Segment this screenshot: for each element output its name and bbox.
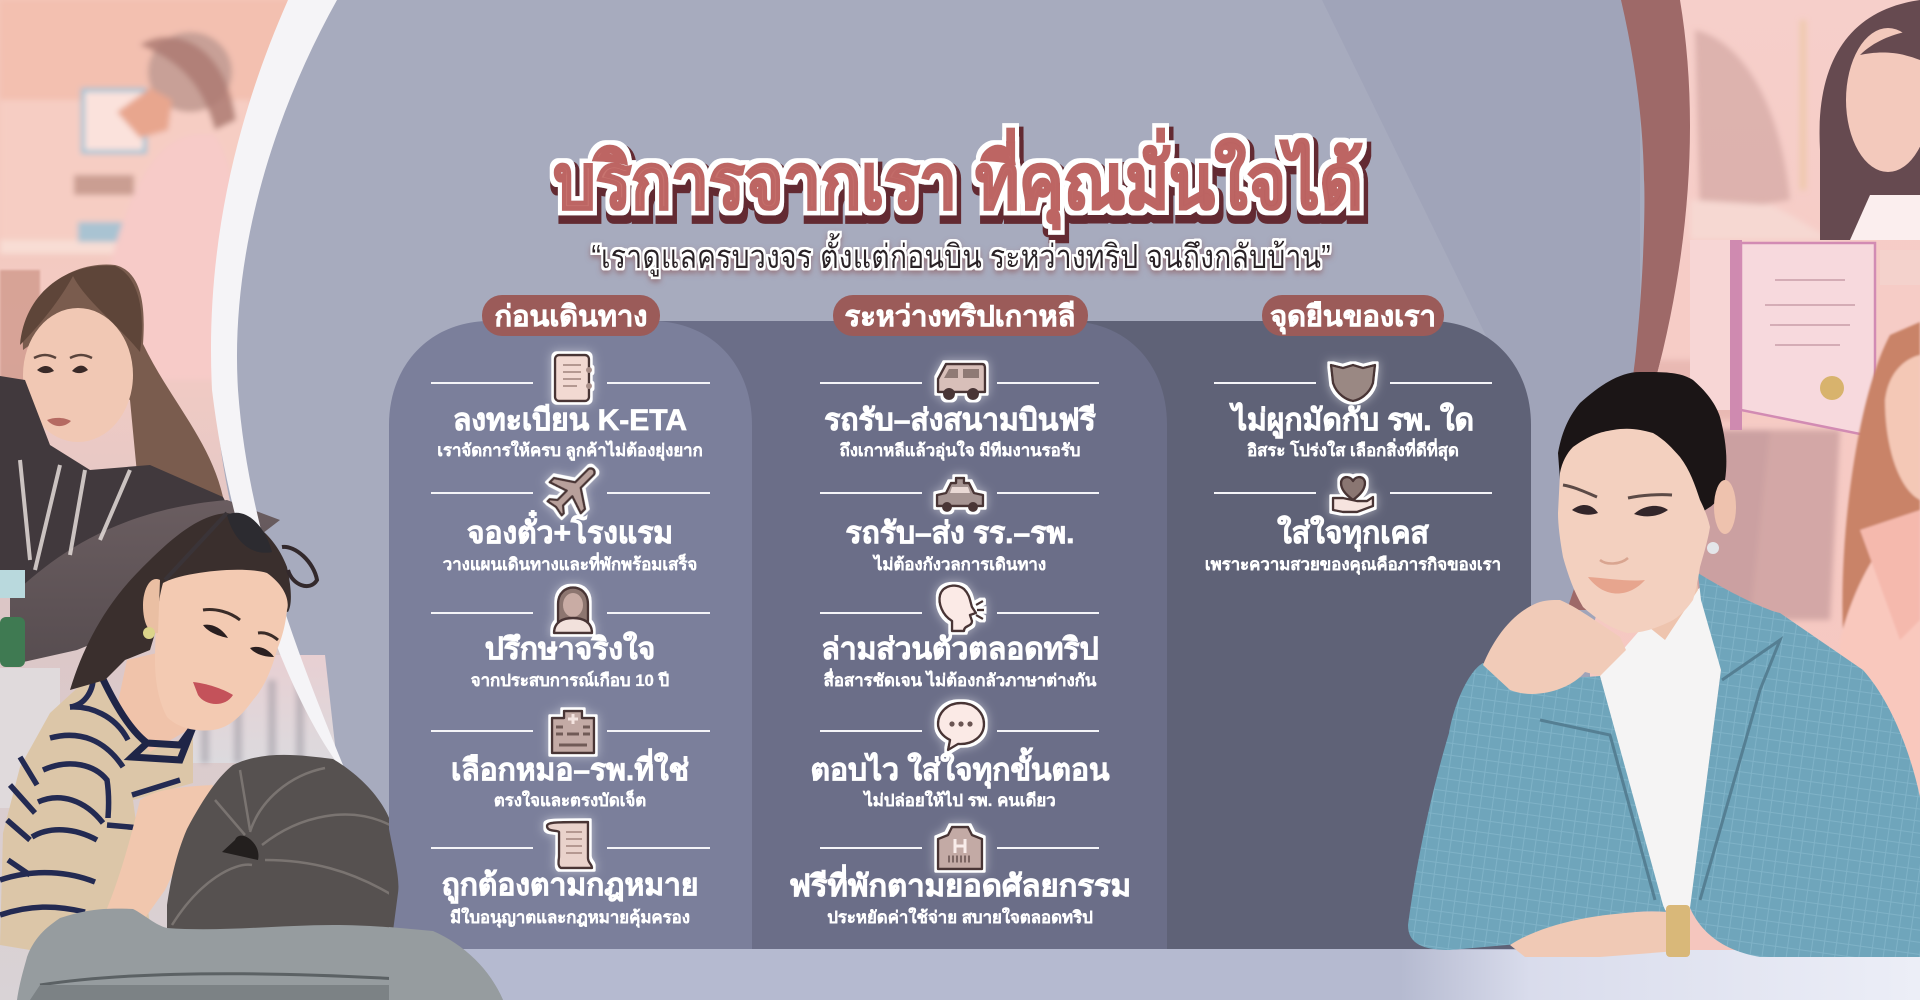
column 2 item: free stay: ประหยัดค่าใช้จ่าย สบายใจตลอดทริป — [827, 907, 1093, 927]
column 1 item: flight and hotel — [431, 454, 710, 574]
white arc on the left — [211, 0, 345, 770]
icon: heart in hand — [1333, 477, 1373, 512]
column 1 item: sincere consultation: จากประสบการณ์เกือบ 10 ปี — [471, 670, 669, 690]
column 2 item: personal interpreter: สื่อสารชัดเจน ไม่ต้องกลัวภาษาต่างกัน — [824, 668, 1097, 690]
column 1 item: sincere consultation — [431, 588, 710, 690]
column 2 item: airport transfer: รถรับ–ส่งสนามบินฟรี — [824, 404, 1096, 437]
neck — [1640, 560, 1698, 640]
hand — [1483, 600, 1626, 694]
icon: speech bubble — [938, 703, 984, 750]
icon: speaking head — [940, 586, 984, 631]
blazer — [1408, 663, 1666, 950]
ear and earring — [1714, 480, 1736, 534]
column 2 item: hotel to hospital transfer: รถรับ–ส่ง รร.–รพ. — [846, 517, 1074, 550]
column 1 item: flight and hotel: วางแผนเดินทางและที่พักพร้อมเสร็จ — [443, 552, 697, 574]
panel: column 3 our stance — [1060, 321, 1531, 949]
column 3 item: no hospital ties: ไม่ผูกมัดกับ รพ. ใด — [1229, 402, 1474, 439]
column 2 item: fast reply: ตอบไว ใส่ใจทุกขั้นตอน — [811, 747, 1110, 789]
facial features — [37, 366, 88, 373]
icon: handshake — [1331, 365, 1375, 401]
icon: doctor — [554, 588, 592, 633]
column 2 item: hotel to hospital transfer — [820, 478, 1099, 574]
icon: van — [938, 364, 985, 400]
photo: faded curtain — [0, 655, 337, 808]
pill: our stance: จุดยืนของเรา — [1270, 301, 1436, 334]
panel: column 1 before travel — [389, 321, 752, 949]
column 3 item: care for every case: ใส่ใจทุกเคส — [1277, 515, 1430, 552]
photo: woman in dark cardigan — [0, 265, 280, 667]
column 2 item: airport transfer: ถึงเกาหลีแล้วอุ่นใจ มีทีมงานรอรับ — [840, 440, 1080, 461]
title: บริการจากเรา ที่คุณมั่นใจได้ — [553, 128, 1363, 229]
brown arc — [1567, 0, 1694, 610]
face — [1558, 429, 1710, 633]
photo: chair overlap on column 1 edge — [389, 927, 503, 1000]
pill: before travel: ก่อนเดินทาง — [495, 301, 647, 333]
column 2 item: free stay — [789, 827, 1131, 927]
column 1 item: flight and hotel: จองตั๋ว+โรงแรม — [467, 510, 673, 550]
photo: certificate backdrop — [1580, 0, 1920, 1000]
photo: consultant in blue blazer — [1408, 372, 1920, 957]
column 1 item: K-ETA: ลงทะเบียน K-ETA — [453, 404, 687, 437]
photo: woman in striped top — [0, 513, 317, 960]
column 3 item: no hospital ties: อิสระ โปร่งใส เลือกสิ่งที่ดีที่สุด — [1247, 438, 1459, 461]
photo: head with tied hair — [167, 755, 399, 935]
pill: during the Korea trip: ระหว่างทริปเกาหลี — [845, 301, 1075, 333]
subtitle: “เราดูแลครบวงจร ตั้งแต่ก่อนบิน ระหว่างทริป จนถึงกลับบ้าน” — [591, 233, 1331, 277]
column 2 item: hotel to hospital transfer: ไม่ต้องกังวลการเดินทาง — [872, 554, 1046, 574]
icon: notebook — [555, 355, 592, 401]
column 2 item: fast reply — [811, 703, 1110, 810]
column 1 item: choose doctor and hospital: เลือกหมอ–รพ.ที่ใช่ — [451, 748, 689, 787]
column 1 item: K-ETA — [431, 355, 710, 462]
column 2 item: airport transfer — [820, 364, 1099, 461]
photo: grey treatment chair — [17, 909, 503, 1000]
column 2 item: free stay: ฟรีที่พักตามยอดศัลยกรรม — [789, 864, 1131, 903]
shirt — [1600, 587, 1721, 910]
forearm and watch — [1510, 912, 1690, 957]
column 1 item: choose doctor and hospital: ตรงใจและตรงบัดเจ็ต — [494, 789, 646, 810]
column 1 item: legal: มีใบอนุญาตและกฎหมายคุ้มครอง — [450, 907, 690, 928]
column 3 item: no hospital ties — [1214, 365, 1492, 461]
column 3 item: care for every case — [1205, 477, 1501, 575]
column 3 item: care for every case: เพราะความสวยของคุณคือภารกิจของเรา — [1205, 554, 1501, 575]
column 2 item: personal interpreter — [820, 586, 1099, 690]
icon: hotel — [938, 827, 982, 869]
photo: pink office backdrop — [0, 0, 288, 1000]
panel: column 2 during the Korea trip — [650, 321, 1167, 949]
column 1 item: legal — [431, 822, 710, 928]
icon: scroll — [547, 822, 592, 868]
icon: taxi — [937, 478, 983, 512]
table — [1400, 950, 1920, 1000]
column 1 item: sincere consultation: ปรึกษาจริงใจ — [485, 631, 655, 666]
icon: hospital — [552, 711, 594, 753]
icon: plane — [539, 454, 609, 524]
column 1 item: choose doctor and hospital — [431, 711, 710, 810]
column 2 item: fast reply: ไม่ปล่อยให้ไป รพ. คนเดียว — [862, 790, 1056, 810]
hair — [1558, 372, 1726, 520]
panel: left photo collage — [0, 0, 503, 1000]
panel: right photo collage — [1567, 0, 1920, 1000]
column 2 item: personal interpreter: ล่ามส่วนตัวตลอดทริป — [821, 633, 1099, 666]
column 1 item: K-ETA: เราจัดการให้ครบ ลูกค้าไม่ต้องยุ่งยาก — [437, 440, 703, 462]
photo: head overlap on column 1 edge — [389, 829, 398, 931]
column 1 item: legal: ถูกต้องตามกฎหมาย — [442, 869, 698, 904]
pill: before travel — [482, 295, 660, 336]
